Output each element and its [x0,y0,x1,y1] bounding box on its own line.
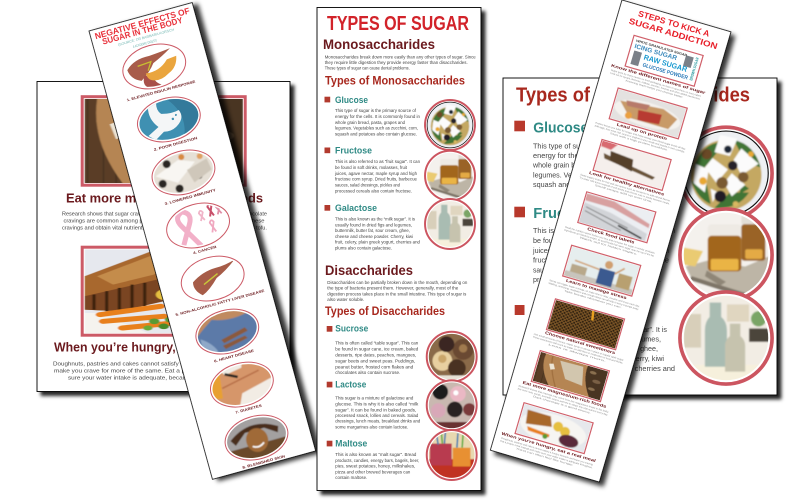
text: galactose description: usually found in dried figs and legumes, [335,222,412,227]
text: glucose description: legumes. Vegetables such as zucchini, corn, [335,126,418,131]
text: maltose description: contain maltose. [335,475,367,480]
text: fructose description: This is also referred to as “fruit sugar”. It can [335,159,420,164]
text: glucose description: energy for the cells. It is commonly found in [533,151,675,160]
text: step 5 note: Walking, stretching, meditation and enough sleep can all help to keep cravings away. [548,282,640,311]
text: step 5 note: Take breaks whenever you can. [564,289,623,309]
caption: heart disease: 6. HEART DISEASE [214,349,255,364]
text: glucose description [335,108,420,136]
photo: wooden bowl of seeds [82,97,245,185]
text: step 2 note: Start with a high protein breakfast. [610,132,669,152]
image: sugar names word cloud: BROWN SUGAR [688,57,700,81]
text: step 6 note: These sweeteners still count as sugar, so add them in moderation to food and drinks. [532,336,624,365]
caption: learn to manage stress: Learn to manage stress [565,278,628,300]
text: maltose description [335,452,419,480]
text: galactose description: plums also contain galactose. [335,246,392,251]
photo: blemished skin [224,414,288,461]
text: sucrose description [335,340,419,375]
text: monosaccharides intro: Monosaccharides break down more easily than any other types of sugar. Since [325,54,476,60]
photo: milk bottles circle [424,198,476,250]
photo: honey jars circle [424,150,476,202]
caption: check food labels: Check food labels [587,226,636,245]
text: disaccharides intro: the type of bacteria present them. However, generally, most of the [327,286,459,291]
text: step 4 note: Ingredients are listed by weight, so avoid foods that name sugar near the top of the list. [564,229,655,258]
image: sugar names word cloud: GLUCOSE POWDER [642,62,689,81]
marker: galactose square [324,205,330,211]
heading: disaccharides: Disaccharides [325,262,413,278]
text: step 5 note: Stress can trigger sugar cravings, so make time to relax, breathe and move each day. [549,279,640,308]
text: lactose description: dressings, lunch meats, breakfast drinks and [335,419,421,424]
photo: roast meat with vegetables [80,246,173,337]
text: step 6 note: Use small amounts of honey, maple syrup or stevia in place of regular table sugar. [533,333,625,362]
text: fructose description [334,159,420,193]
text: real meal paragraph: Doughnuts, pastries and cakes cannot satisfy a hungry stomach. They will only [53,362,271,368]
photo: salad circle [684,125,774,214]
title: negative effects of sugar in the body: NEGATIVE EFFECTS OF [94,6,191,41]
icon: pills [152,150,216,196]
text: glucose description: legumes. Vegetables such as zucchini, corn, [533,170,672,179]
heading: lactose: Lactose [335,380,366,390]
text: lactose description: glucose. This is why it is also called “milk [335,402,419,407]
photo: protein sandwich [609,87,688,139]
photo: wooden bowl of seeds [531,351,609,402]
text: fructose description: This is also referred to as “fruit sugar”. It can [533,226,675,235]
caption: poor digestion: 2. POOR DIGESTION [153,136,198,152]
icon: pink ribbons [166,202,230,248]
text: fructose description: processed cereals also contain fructose. [335,188,412,193]
marker: fructose square [324,148,330,153]
photo: honey jars circle [678,207,774,303]
text: step 6 note: Less is always more. [548,343,607,363]
text: step 3 note: Small swaps add up over time. [594,184,653,204]
text: lactose description: processed snack, lollies and cereals. Salad [335,413,419,418]
marker: glucose square [324,97,330,102]
marker: fructose square [514,207,525,217]
text: monosaccharides intro: they require little digestion they provide energy faster than disaccharides. [325,60,468,65]
text: lactose description: This sugar is a mixture of galactose and [335,396,414,401]
text: step 8 note: Eat a proper meal instead and make sure your water intake is adequate throughout. [500,440,593,470]
caption: non-alcoholic fatty liver disease: 5. NON-ALCOHOLIC FATTY LIVER DISEASE [175,289,266,317]
text: galactose description [533,325,675,382]
subtitle: source credit [118,27,177,52]
text: fructose description: juices, agave nectar, maple syrup and high [532,246,669,255]
caption: lead up on protein: Lead up on protein [616,122,668,141]
photo: malt drinks circle [426,429,478,481]
text: step 7 note: Dark chocolate is a good source. [533,395,592,415]
heading: when you're hungry: When you’re hungry, eat a real meal [54,340,264,355]
text: galactose description: fruit, celery, plain greek yogurt, cherries and [335,240,420,245]
text: maltose description: pies, sweet potatoes, honey, milkshakes, [335,464,415,469]
heading: fructose: Fructose [533,205,595,222]
text: real meal paragraph [53,362,271,382]
text: step 1 note: Look out for syrups, dextrose, maltose, sucrose, fructose and other added sweeteners. [610,72,701,101]
caption: lowered immunity: 3. LOWERED IMMUNITY [164,188,217,206]
text: monosaccharides intro: These types of sugar can cause dental problems. [325,66,410,70]
photo: honeycomb [546,298,625,350]
title: negative effects of sugar in the body: SUGAR IN THE BODY [101,15,184,47]
text: sucrose description: desserts, ripe dates, peaches, mangoes, [335,352,416,357]
icon: stomach [136,96,201,142]
text: real meal paragraph: make you crave for more of the same. Eat a proper meal instead and make [54,368,269,374]
text: galactose description: plums also contain galactose. [533,374,628,382]
text: glucose description: whole grain bread, pasta, grapes and [532,161,650,170]
marker: glucose square [514,121,525,131]
text: step 1 note: Sugar goes by many names on food packaging, so learn to spot them on every label. [610,69,702,98]
image: sugar names word cloud: ICING SUGAR [634,43,678,62]
text: sucrose description: chocolates also contain sucrose. [335,370,400,375]
text: galactose description: buttermilk, butter fat, sour cream, ghee, [533,344,658,353]
heading: types of disaccharides: Types of Disaccharides [325,304,445,318]
heading: fructose: Fructose [335,146,372,156]
text: lactose description [335,396,421,429]
text: step 2 note: Add eggs, lean meat, fish, beans or yoghurt to your meals and snacks to curb cravings. [594,124,686,154]
photo: milk bottles circle [678,290,774,386]
text: disaccharides intro: also water soluble. [327,297,364,302]
photo: spices and healthy alternatives [592,139,672,191]
text: real meal paragraph: sure your water intake is adequate, because thirst feels like hunger. [68,376,258,382]
panel: back-left sheet, magnesium foods and real meal [37,82,290,392]
caption: blemished skin: 8. BLEMISHED SKIN [242,454,286,470]
heading: sucrose: Sucrose [335,324,368,334]
caption: look for healthy alternatives: Look for healthy alternatives [589,170,666,197]
text: lactose description: some margarines also contain lactose. [335,424,408,429]
text: galactose description: cheese and cheese powder. Cherry, kiwi [533,354,664,363]
text: step 3 note: Try water with lemon instead of soft drinks and choose nuts or seeds between meals. [579,176,670,206]
caption: cancer: 4. CANCER [193,245,217,255]
text: glucose description: squash and potatoes also contain glucose. [533,180,669,189]
text: galactose description: This is also known as the “milk sugar”. It is [335,217,416,222]
text: disaccharides intro: Disaccharides can be partially broken down in the mouth, depending on [327,280,468,285]
photo: ice cream circle [426,331,478,383]
text: glucose description: squash and potatoes also contain glucose. [335,132,417,136]
text: step 7 note: Eat more nuts, seeds, avocado, beans and tofu to obtain this vital nutrient every day. [517,387,609,417]
text: fructose description: fructose corn syrup. Dried fruits, barbecue [533,256,669,265]
text: step 7 note: Research shows that cravings may come from low magnesium levels in the body. [518,385,610,414]
panel: left tilted strip, negative effects of sugar [89,3,316,479]
caption: know the different names of sugar: Know the different names of sugar [611,63,707,95]
text: fructose description: processed cereals also contain fructose. [533,275,661,284]
image: sugar names word cloud: RAW SUGAR [643,53,689,74]
photo: roast meat with vegetables [514,402,594,454]
caption: diabetes: 7. DIABETES [235,403,263,415]
text: sucrose description: be found in sugar cane, ice cream, baked [335,346,419,351]
panel: back-right sheet, types of monosaccharides enlarged [503,78,777,395]
text: fructose description: be found in soft drinks, molasses, fruit [335,165,408,170]
text: magnesium paragraph: cravings and obtain vital nutrients, eat more nuts, seeds, avocado, beans and tofu. [62,226,267,232]
text: disaccharides intro [327,280,468,302]
text: step 1 note: Knowing them helps you choose better. [625,79,684,99]
marker: maltose square [327,441,332,446]
text: glucose description [532,141,675,189]
text: maltose description: pizza and other brewed beverages can [335,469,411,474]
panel: centre sheet, types of sugar [317,8,481,490]
heading: galactose: Galactose [335,203,377,213]
heading: types of monosaccharides: Types of Monosaccharides [516,85,750,107]
text: fructose description: juices, agave nectar, maple syrup and high [334,171,417,176]
panel: right tilted strip, steps to kick a sugar addiction [490,0,731,482]
text: galactose description: fruit, celery, plain greek yogurt, cherries and [533,364,675,373]
text: glucose description: This type of sugar is the primary source of [335,108,417,113]
text: magnesium paragraph [62,211,267,232]
heading: glucose: Glucose [335,95,368,105]
title: steps to kick a sugar addiction: STEPS TO KICK A [637,8,711,39]
heading: maltose: Maltose [335,439,367,449]
text: sucrose description: This is often called “table sugar”. This can [335,340,419,345]
text: step 4 note: Read the nutrition panel before you buy and compare the sugar in similar products. [565,226,656,255]
image: sugar names word cloud: WHITE GRANULATED SUGAR [636,39,688,58]
text: fructose description: sauces, salad dressings, pickles and [335,182,400,188]
title: types of sugar: TYPES OF SUGAR [327,12,469,35]
heading: monosaccharides: Monosaccharides [323,36,435,52]
photo: diabetes test [210,362,274,408]
text: step 3 note: Swap sugary treats for fruit and use spices such as cinnamon to add natural flavour. [580,173,671,203]
photo: food label [577,191,656,243]
text: fructose description: be found in soft drinks, molasses, fruit [533,236,654,245]
text: magnesium paragraph: cravings are common among people with low magnesium levels. To curb these [64,218,265,224]
icon: fatty liver [180,256,245,302]
image: sugar names word cloud [625,35,703,86]
text: step 2 note: Protein keeps you fuller for longer and helps steady your blood sugar levels all day. [595,122,686,151]
text: glucose description: This type of sugar is the primary source of [533,141,669,150]
marker: galactose square [515,305,524,315]
marker: sucrose square [327,326,332,332]
text: monosaccharides intro [325,54,476,70]
title: steps to kick a sugar addiction: SUGAR ADDICTION [628,16,719,51]
text: galactose description: This is also known as the “milk sugar”. It is [533,325,667,334]
subtitle: source credit: & ACADEMIC DIGEST) [132,38,157,49]
text: galactose description: usually found in dried figs and legumes, [533,334,661,344]
caption: choose natural sweeteners: Choose natural sweeteners [544,330,617,355]
heading: galactose: Galactose [533,303,603,320]
text: galactose description [335,217,420,251]
text: glucose description: energy for the cells. It is commonly found in [335,114,420,119]
text: fructose description: sauces, salad dressings, pickles and [533,266,642,274]
text: galactose description: cheese and cheese powder. Cherry, kiwi [335,234,413,239]
icon: liver and pancreas [122,44,186,90]
marker: lactose square [327,382,332,387]
text: lactose description: sugar”. It can be found in baked goods, [335,407,416,412]
text: fructose description [532,226,675,284]
caption: eat more magnesium-rich foods: Eat more magnesium-rich foods [522,380,608,409]
photo: salad circle [424,99,476,151]
photo: cake pops circle [426,379,478,431]
heading: eat more magnesium: Eat more magnesium-rich foods [66,191,263,206]
text: glucose description: whole grain bread, pasta, grapes and [335,120,405,125]
caption: elevated insulin response: 1. ELEVATED INSULIN RESPONSE [126,79,196,102]
photo: woman managing stress [562,245,641,297]
text: maltose description: products, candies, energy bars, bagels, beer, [335,458,419,463]
text: fructose description: fructose corn syrup. Dried fruits, barbecue [335,177,417,182]
text: sucrose description: peanut butter, frosted corn flakes and [335,364,414,369]
text: sucrose description: sugar beets and sweet peas. Puddings, [335,358,415,363]
subtitle: source credit: (SOURCE: DR BARBARA KORSCH [118,27,175,47]
caption: when you're hungry, eat a real meal: When you're hungry, eat a real meal [501,431,596,463]
heading: types of monosaccharides: Types of Monosaccharides [325,74,465,88]
text: disaccharides intro: digestion process takes place in the small intestine. This type of sugar is [327,291,467,296]
photo: heart disease [195,308,260,354]
heading: glucose: Glucose [533,119,588,136]
title: steps to kick a sugar addiction [628,6,721,51]
text: step 8 note: Thirst can often feel like hunger. [515,447,574,467]
text: galactose description: buttermilk, butter fat, sour cream, ghee, [335,228,410,233]
text: magnesium paragraph: Research shows that sugar cravings may be due to a lack of magnesium. Chocolate [62,211,267,217]
text: maltose description: This is also known as “malt sugar”. Bread [335,452,417,457]
text: step 4 note: Watch out for hidden sugars. [579,236,638,256]
text: step 8 note: Doughnuts, pastries and cakes cannot satisfy a hungry stomach and leave you craving. [501,437,594,467]
